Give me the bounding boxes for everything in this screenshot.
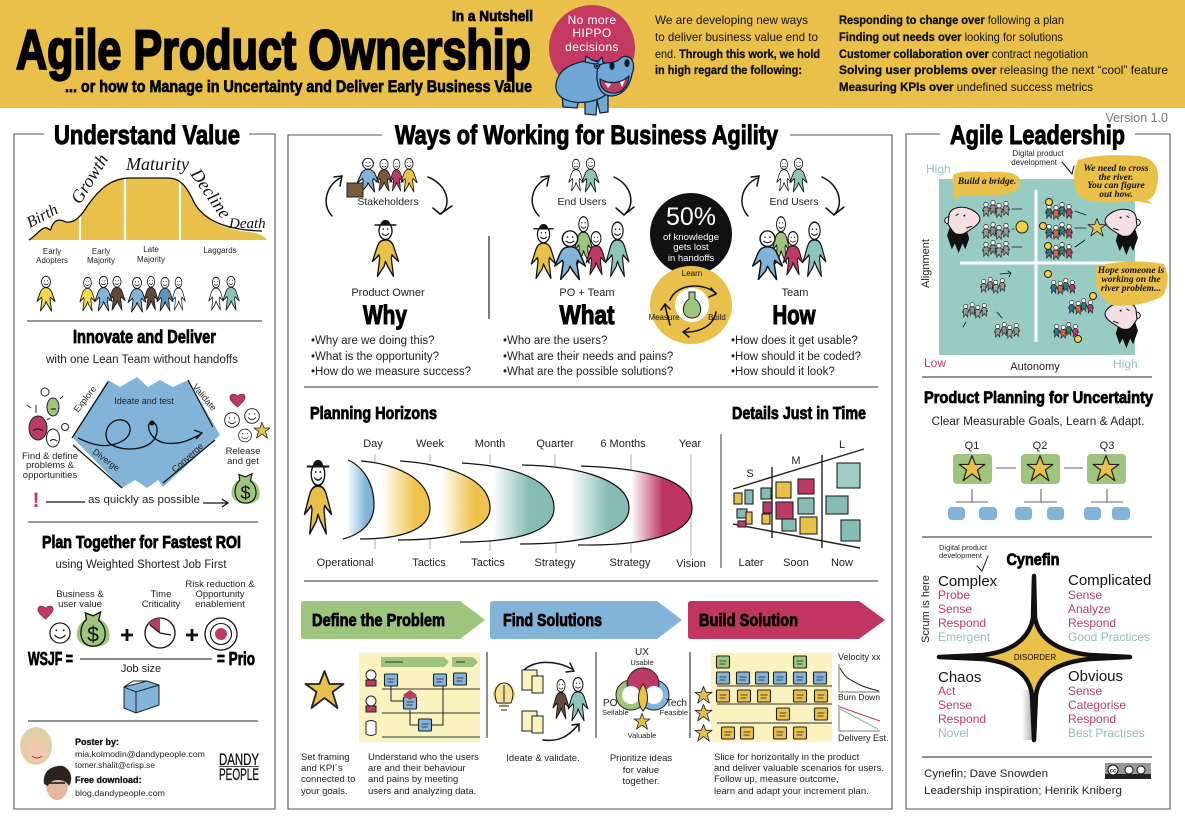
arrow: find solutions — [490, 601, 682, 639]
credits: Leadership inspiration; Henrik Kniberg — [924, 785, 1122, 797]
wsjf formula — [28, 579, 255, 713]
hippo badge — [549, 5, 635, 115]
details just in time: Details Just in Time — [732, 403, 866, 423]
details just in time: Soon — [783, 557, 809, 569]
cynefin framework — [920, 543, 1151, 740]
50 percent callout: gets lost — [673, 242, 709, 253]
venn diagram: Valuable — [628, 731, 656, 740]
column: what: What — [560, 300, 615, 330]
cynefin framework: Respond — [938, 712, 986, 726]
column: how: •How does it get usable? — [731, 335, 858, 347]
column: how: •How should it be coded? — [731, 351, 861, 363]
adopter labels: Majority — [137, 255, 165, 264]
adopter labels: Adopters — [36, 256, 68, 265]
cynefin framework: Scrum is here — [920, 575, 932, 643]
panel: ways of working — [288, 120, 892, 809]
planning horizons: Operational — [317, 557, 373, 569]
adopter labels: Early — [43, 247, 61, 256]
learn measure build loop — [648, 266, 732, 344]
details just in time: Now — [831, 557, 853, 569]
column: how: Team — [782, 287, 808, 299]
alignment autonomy matrix: Low — [924, 356, 946, 370]
manifesto values: Finding out needs over looking for solutions — [839, 30, 1063, 44]
planning horizons: Quarter — [536, 438, 574, 450]
arrow: find solutions: Find Solutions — [503, 610, 602, 630]
adopter people — [37, 276, 239, 312]
double diamond: Validate — [190, 382, 219, 413]
dandy people logo: PEOPLE — [219, 765, 259, 784]
version label: Version 1.0 — [1105, 111, 1168, 125]
step captions: together. — [623, 776, 659, 787]
cynefin framework: Probe — [938, 588, 970, 602]
cynefin framework: Obvious — [1068, 668, 1123, 685]
teams — [963, 198, 1106, 342]
ideate illustration — [493, 662, 588, 740]
quarter goal tree: Q2 — [1033, 440, 1047, 452]
step captions: are and their behaviour — [368, 763, 466, 774]
heading: product planning — [924, 388, 1153, 428]
venn diagram: Sellable — [602, 708, 629, 717]
release faces: Release — [226, 446, 260, 457]
cynefin framework: Respond — [1068, 712, 1116, 726]
arrow: build solution — [688, 601, 885, 639]
step captions: Understand who the users — [368, 752, 479, 763]
cynefin framework: Good Practices — [1068, 630, 1150, 644]
alignment autonomy matrix: Autonomy — [1010, 361, 1060, 373]
lifecycle curve: Growth — [66, 150, 112, 207]
step captions: and KPI´s — [301, 763, 343, 774]
cynefin framework: Categorise — [1068, 698, 1126, 712]
story board — [695, 653, 832, 742]
double diamond: Explore — [72, 384, 98, 414]
heading: innovate and deliver — [45, 327, 238, 366]
problem faces — [22, 388, 78, 481]
column: how: End Users — [769, 196, 819, 208]
hippo badge: HIPPO — [572, 26, 612, 40]
step captions: Set framing — [301, 752, 350, 763]
horizon shapes — [343, 460, 692, 545]
heading: plan together — [42, 532, 241, 571]
heading: plan together: using Weighted Shortest Job First — [56, 559, 227, 571]
adopter labels: Late — [143, 245, 159, 254]
adopter labels: Laggards — [203, 246, 237, 255]
cynefin framework: Analyze — [1068, 602, 1111, 616]
manifesto values — [839, 13, 1168, 94]
heading: understand value: Understand Value — [54, 120, 240, 150]
adopter labels — [36, 245, 237, 265]
double diamond: Ideate and test — [114, 396, 174, 406]
manifesto intro: to deliver business value end to — [655, 30, 818, 44]
metrics charts: Velocity xx — [838, 652, 881, 662]
speech bubbles: We need to cross — [1084, 164, 1149, 174]
lifecycle curve: Maturity — [125, 154, 189, 174]
double diamond: Diverge — [91, 447, 122, 473]
planning horizons: 6 Months — [600, 438, 646, 450]
step captions — [301, 752, 884, 797]
cynefin framework: Sense — [938, 698, 972, 712]
column: why: •Why are we doing this? — [311, 335, 435, 347]
arrow: define the problem — [301, 601, 485, 639]
double diamond — [72, 377, 220, 488]
speech bubbles: Build a bridge. — [957, 177, 1016, 187]
metrics charts: Delivery Est. — [838, 733, 889, 743]
heading: innovate and deliver: with one Lean Team without handoffs — [45, 354, 238, 366]
50 percent callout: 50% — [666, 203, 716, 231]
column: what — [503, 158, 673, 378]
author text: mia.kolmodin@dandypeople.com — [75, 749, 205, 759]
quarter goal tree: Q3 — [1100, 440, 1114, 452]
arrow: build solution: Build Solution — [699, 610, 798, 630]
venn diagram: PO — [603, 698, 618, 709]
manifesto intro: in high regard the following: — [655, 63, 802, 77]
alignment autonomy matrix: High — [1113, 357, 1138, 371]
cynefin framework: Sense — [1068, 588, 1102, 602]
column: why: Stakeholders — [357, 196, 419, 208]
column: what: PO + Team — [559, 287, 615, 299]
manifesto values: Responding to change over following a plan — [839, 13, 1064, 27]
manifesto values: Measuring KPIs over undefined success metrics — [839, 80, 1093, 94]
speech bubbles: Hope someone is — [1097, 266, 1165, 276]
creative commons badge — [1105, 763, 1151, 779]
column: how: How — [772, 300, 816, 330]
venn diagram — [602, 647, 688, 740]
details just in time: Later — [738, 557, 764, 569]
column: what: •What are their needs and pains? — [503, 351, 673, 363]
problem faces: Find & define — [22, 451, 78, 462]
cynefin framework: Sense — [938, 602, 972, 616]
cynefin framework: Complex — [938, 573, 998, 590]
column: how: •How should it look? — [731, 366, 835, 378]
title block: ... or how to Manage in Uncertainty and Deliver Early Business Value — [65, 78, 532, 96]
planning horizons: Month — [475, 438, 505, 450]
credits: Cynefin; Dave Snowden — [924, 768, 1048, 780]
cynefin framework: Emergent — [938, 630, 991, 644]
50 percent callout: in handoffs — [668, 253, 714, 264]
learn measure build loop: Learn — [682, 269, 702, 278]
wsjf formula: enablement — [195, 599, 245, 610]
manifesto values: Solving user problems over releasing the next “cool” feature — [839, 63, 1168, 77]
icon: goal star — [306, 671, 344, 708]
adopter labels: Majority — [87, 256, 115, 265]
planning horizons: Day — [363, 438, 383, 450]
speech bubbles: the river. — [1099, 173, 1133, 183]
cynefin framework: Cynefin — [1006, 550, 1060, 569]
speech bubbles — [953, 155, 1168, 306]
as quickly as possible — [32, 474, 260, 512]
creative commons badge: cc — [1110, 768, 1117, 774]
lifecycle curve — [24, 150, 267, 242]
manifesto intro: We are developing new ways — [655, 13, 808, 27]
cynefin framework: Best Practises — [1068, 726, 1145, 740]
step captions: Ideate & validate. — [506, 753, 580, 764]
panel: agile leadership — [906, 120, 1170, 809]
wsjf formula: = Prio — [217, 649, 255, 669]
cynefin framework: Digital product — [939, 543, 988, 552]
user story map — [359, 653, 480, 742]
heading: ways of working: Ways of Working for Business Agility — [395, 120, 778, 150]
cynefin framework: Complicated — [1068, 572, 1151, 589]
details just in time: S — [746, 468, 754, 480]
dandy people logo — [219, 750, 259, 784]
cynefin framework: Act — [938, 684, 956, 698]
metrics charts — [838, 652, 889, 743]
author photos — [20, 727, 71, 800]
column: how — [731, 158, 861, 378]
planning horizons: Tactics — [471, 557, 505, 569]
learn measure build loop: Build — [708, 313, 726, 322]
title block: In a Nutshell — [452, 8, 533, 25]
alignment autonomy matrix: High — [926, 162, 951, 176]
leader heads — [945, 207, 1140, 348]
step captions: learn and adapt your increment plan. — [714, 786, 869, 797]
release faces: and get — [227, 456, 259, 467]
speech bubbles: working on the — [1101, 275, 1161, 285]
cynefin framework: development — [939, 551, 983, 560]
column: why: •How do we measure success? — [311, 366, 471, 378]
cynefin framework: DISORDER — [1014, 653, 1056, 662]
planning horizons: Strategy — [535, 557, 576, 569]
panel: understand value — [14, 120, 275, 809]
lifecycle curve: Decline — [186, 164, 235, 222]
column: what: End Users — [557, 196, 607, 208]
alignment autonomy matrix — [920, 149, 1168, 373]
wsjf formula: Opportunity — [195, 589, 245, 600]
planning horizons: Strategy — [610, 557, 651, 569]
details just in time — [732, 403, 866, 569]
speech bubbles: out how. — [1099, 190, 1133, 200]
planning horizons: Year — [679, 438, 701, 450]
alignment autonomy matrix: development — [1011, 158, 1058, 167]
cynefin framework: Sense — [1068, 684, 1102, 698]
column: what: •What are the possible solutions? — [503, 366, 673, 378]
lifecycle curve: Birth — [24, 201, 61, 232]
speech bubbles: You can figure — [1087, 181, 1146, 191]
planning horizons: Tactics — [412, 557, 446, 569]
cynefin framework: Respond — [938, 616, 986, 630]
details just in time: M — [791, 455, 801, 467]
author text: tomer.shalit@crisp.se — [75, 760, 155, 770]
release faces — [225, 394, 270, 467]
hippo badge: decisions — [565, 40, 619, 54]
adopter labels: Early — [92, 247, 110, 256]
learn measure build loop: Measure — [648, 313, 680, 322]
manifesto intro: end. Through this work, we hold — [655, 47, 820, 61]
alignment autonomy matrix: Alignment — [920, 239, 932, 288]
step captions: users and analyzing data. — [368, 786, 476, 797]
credits — [924, 768, 1122, 797]
wsjf formula: WSJF = — [28, 649, 73, 669]
step captions: for value — [623, 765, 659, 776]
quarter goal tree: Q1 — [965, 440, 979, 452]
dandy people logo: DANDY — [219, 750, 259, 769]
50 percent callout — [650, 193, 732, 275]
wsjf formula: Business & — [56, 589, 104, 600]
wsjf formula: Risk reduction & — [185, 579, 255, 590]
cynefin framework: Respond — [1068, 616, 1116, 630]
wsjf formula: Time — [151, 589, 171, 600]
step captions: Follow up, measure outcome, — [714, 774, 839, 785]
double diamond: Converge — [170, 441, 205, 474]
step captions: and deliver valuable scenarios for users. — [714, 763, 884, 774]
wsjf formula: user value — [58, 599, 102, 610]
details just in time: L — [839, 439, 845, 451]
metrics charts: Burn Down — [838, 692, 880, 702]
column: why: Why — [363, 300, 407, 330]
arrow: define the problem: Define the Problem — [312, 610, 445, 630]
wsjf formula: Criticality — [142, 599, 181, 610]
alignment autonomy matrix: Digital product — [1012, 149, 1064, 158]
planning horizons: Vision — [676, 558, 706, 570]
icon: hippo — [556, 56, 634, 115]
step captions: Slice for horizontally in the product — [714, 752, 860, 763]
column: why: Product Owner — [351, 287, 425, 299]
quarter goal tree — [948, 440, 1130, 520]
speech bubbles: river problem... — [1101, 284, 1161, 294]
hippo badge: No more — [568, 13, 616, 27]
heading: innovate and deliver: Innovate and Deliver — [73, 327, 216, 347]
step captions: connected to — [301, 774, 355, 785]
title block: Agile Product Ownership — [16, 18, 531, 81]
cynefin framework: Chaos — [938, 669, 981, 686]
as quickly as possible: as quickly as possible — [88, 494, 200, 506]
author text: blog.dandypeople.com — [75, 788, 165, 798]
title block — [16, 8, 533, 96]
venn diagram: UX — [635, 647, 649, 658]
50 percent callout: of knowledge — [663, 232, 719, 243]
column: why — [311, 158, 471, 378]
venn diagram: Usable — [630, 658, 654, 667]
header band — [0, 0, 1185, 115]
heading: product planning: Clear Measurable Goals, Learn & Adapt. — [932, 416, 1144, 428]
venn diagram: Tech — [666, 698, 687, 709]
column: what: •Who are the users? — [503, 335, 607, 347]
step captions: Prioritize ideas — [610, 753, 672, 764]
column: why: •What is the opportunity? — [311, 351, 439, 363]
manifesto values: Customer collaboration over contract negotiation — [839, 47, 1088, 61]
planning horizons: Week — [416, 438, 444, 450]
heading: agile leadership: Agile Leadership — [950, 120, 1125, 150]
heading: product planning: Product Planning for Uncertainty — [924, 388, 1153, 407]
lifecycle curve: Death — [228, 216, 266, 232]
cynefin framework: Novel — [938, 726, 969, 740]
author text — [75, 737, 205, 798]
manifesto intro — [655, 13, 820, 77]
problem faces: opportunities — [23, 470, 77, 481]
heading: plan together: Plan Together for Fastest ROI — [42, 532, 241, 552]
planning horizons — [304, 403, 706, 570]
author text: Free download: — [75, 775, 142, 785]
venn diagram: Feasible — [660, 708, 688, 717]
step captions: your goals. — [301, 786, 347, 797]
step captions: and pains by meeting — [368, 774, 458, 785]
problem faces: problems & — [26, 460, 75, 471]
author text: Poster by: — [75, 737, 119, 747]
as quickly as possible: ! — [32, 489, 40, 512]
wsjf formula: Job size — [121, 663, 161, 675]
planning horizons: Planning Horizons — [310, 403, 437, 423]
